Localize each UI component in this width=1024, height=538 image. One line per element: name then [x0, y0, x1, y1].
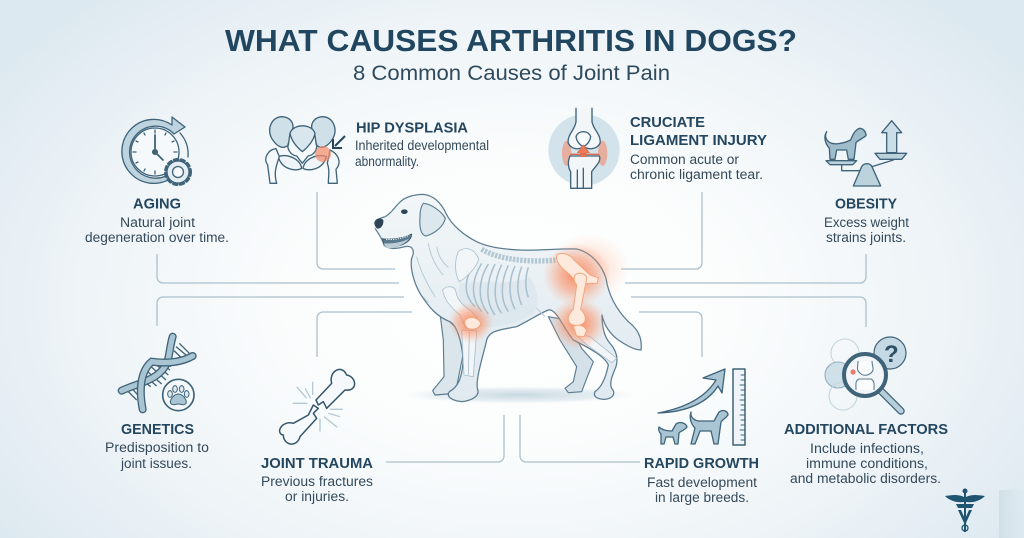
icon: clock with gear — [122, 117, 190, 184]
item: hip dysplasia: abnormality. — [355, 154, 419, 169]
icon: veterinary caduceus logo — [945, 488, 985, 532]
heading: GENETICS — [121, 421, 194, 438]
item: additional factors: immune conditions, — [806, 456, 928, 471]
description: Excess weight — [824, 215, 909, 230]
description: Previous fractures — [261, 474, 373, 489]
description: Fast development — [647, 475, 757, 490]
item: aging: degeneration over time. — [85, 230, 229, 245]
dog neck fur — [417, 243, 545, 317]
item: joint trauma — [261, 369, 373, 504]
elbow joint bone — [465, 318, 481, 329]
far hind leg — [548, 317, 593, 393]
icon: pointing arrow — [333, 136, 345, 148]
heading: RAPID GROWTH — [644, 455, 759, 472]
joint glow: knee — [550, 297, 607, 349]
shoulder blade — [456, 249, 479, 282]
item: rapid growth — [644, 369, 759, 505]
ground shadow — [403, 386, 637, 404]
rib cage — [466, 263, 528, 315]
heading: JOINT TRAUMA — [261, 455, 373, 472]
subtitle: 8 Common Causes of Joint Pain — [353, 61, 670, 85]
item: cruciate ligament injury — [548, 108, 767, 188]
item: cruciate ligament injury: LIGAMENT INJURY — [630, 132, 767, 149]
heading: ADDITIONAL FACTORS — [784, 421, 948, 438]
pelvis bone — [556, 253, 598, 283]
item: cruciate ligament injury: chronic ligament tear. — [630, 167, 763, 182]
heading: CRUCIATE — [630, 114, 705, 131]
joint glow: elbow — [448, 302, 493, 343]
item: obesity: strains joints. — [826, 230, 906, 245]
description: Common acute or — [630, 152, 740, 167]
description: Inherited developmental — [355, 138, 489, 153]
page edge shading — [999, 490, 1024, 538]
lower foreleg bones — [462, 330, 477, 377]
spine — [482, 249, 557, 261]
item: additional factors: and metabolic disorders. — [790, 471, 941, 486]
hip halo behind dog — [547, 233, 630, 303]
upper foreleg bone — [443, 287, 477, 328]
item: obesity — [824, 121, 909, 245]
heading: OBESITY — [835, 196, 897, 212]
item: rapid growth: in large breeds. — [655, 490, 749, 505]
knee lower bone — [573, 325, 587, 337]
item: hip dysplasia — [266, 117, 489, 183]
lower hind leg bones — [575, 333, 617, 363]
icon: magnifier over joint: ? — [884, 341, 899, 368]
connector lines — [157, 192, 866, 462]
dog mouth — [382, 234, 412, 248]
description: Predisposition to — [105, 440, 209, 455]
dog eye — [401, 209, 408, 214]
dog body outline — [375, 194, 641, 402]
item: genetics — [105, 337, 209, 471]
icon: knee joint — [548, 108, 620, 188]
icon: hip inflammation — [315, 146, 331, 162]
dog ear — [420, 203, 445, 236]
far front leg — [433, 313, 467, 395]
icon: pelvis — [266, 117, 339, 183]
icon: growth arrow, ruler and dogs — [658, 369, 745, 445]
title: WHAT CAUSES ARTHRITIS IN DOGS? — [225, 23, 797, 58]
dog chest and belly shading — [459, 277, 537, 327]
dog nose — [374, 219, 383, 229]
item: additional factors — [784, 337, 948, 486]
femur bone — [568, 273, 587, 326]
heading: HIP DYSPLASIA — [356, 120, 468, 136]
dog tongue — [384, 239, 409, 248]
icon: fractured bone — [280, 369, 355, 444]
central dog illustration — [374, 194, 641, 404]
description: Natural joint — [120, 215, 195, 230]
icon: magnifier over joint — [825, 337, 906, 411]
icon: DNA helix and paw — [122, 337, 194, 411]
item: joint trauma: or injuries. — [285, 489, 349, 504]
dog teeth line — [386, 235, 409, 239]
heading: AGING — [133, 196, 181, 212]
icon: dog on scale — [825, 121, 907, 186]
description: Include infections, — [810, 441, 924, 456]
item: genetics: joint issues. — [120, 456, 192, 471]
item: aging — [85, 117, 229, 245]
joint glow: hip — [543, 243, 611, 307]
